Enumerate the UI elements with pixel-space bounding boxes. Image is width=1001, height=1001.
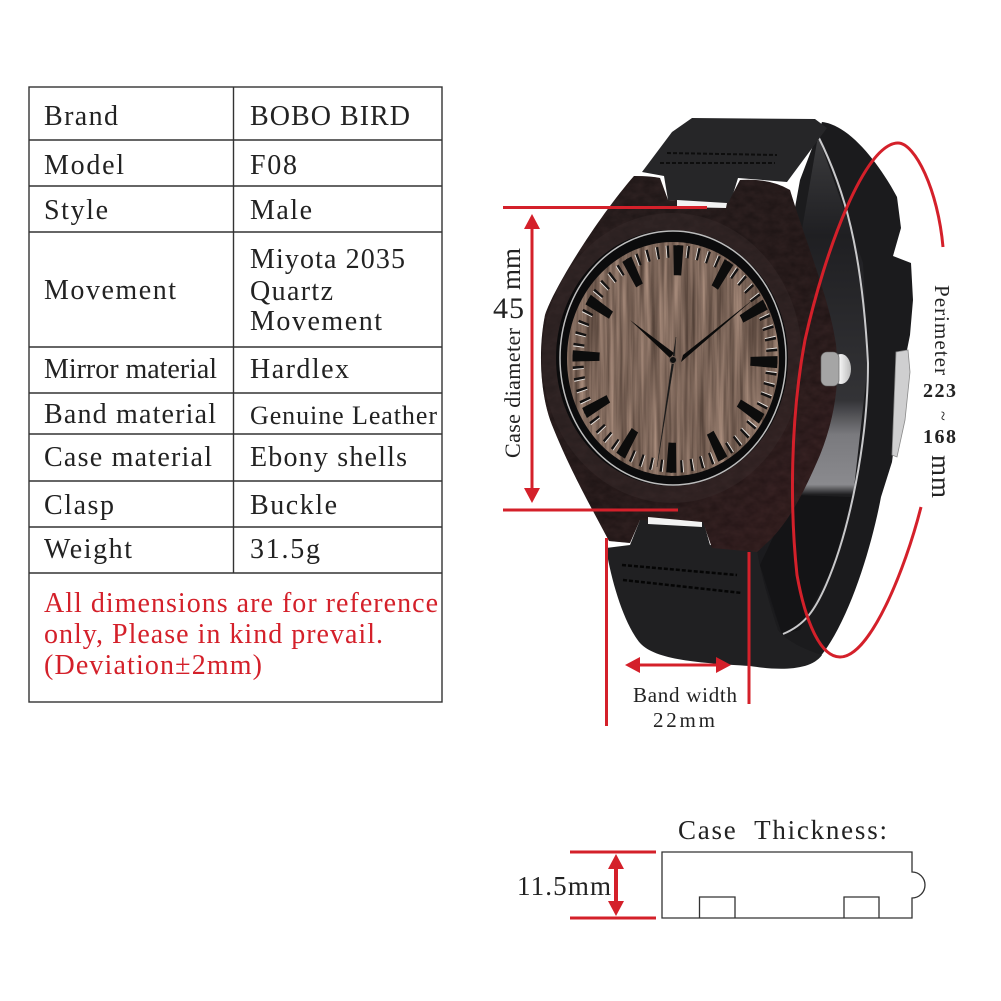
black inner ring — [556, 230, 788, 486]
red disclaimer note: (Deviation±2mm) — [44, 650, 262, 681]
back strap — [745, 122, 913, 668]
top strap — [642, 118, 827, 204]
perimeter loop — [792, 143, 943, 657]
row: clasp: Clasp — [44, 490, 114, 521]
mm unit: mm — [496, 248, 526, 290]
glass caseback — [757, 136, 868, 634]
bottom strap — [606, 520, 822, 669]
row: brand — [44, 101, 410, 132]
45 value: 45 — [493, 292, 524, 325]
223 value: 223 — [923, 380, 956, 402]
case diameter dimension — [493, 208, 707, 510]
perimeter label: Perimeter — [930, 285, 954, 375]
row: style: Male — [250, 195, 312, 226]
bezel — [542, 213, 802, 503]
row: mirror material: Hardlex — [250, 354, 349, 385]
case diameter label: Case diameter — [500, 327, 525, 458]
row: case material: Case material — [44, 442, 212, 473]
perimeter unit: mm — [926, 455, 956, 498]
extension lines — [606, 538, 749, 726]
168 value: 168 — [923, 426, 956, 448]
case thickness diagram — [517, 815, 925, 918]
row: band material: Genuine Leather — [250, 401, 437, 430]
strap inner shadow — [760, 495, 852, 634]
11.5mm value: 11.5mm — [517, 871, 611, 901]
crown — [821, 352, 851, 386]
hour bars — [583, 257, 767, 461]
silver caseback rim — [783, 136, 868, 634]
silver ring — [560, 231, 786, 485]
thickness extension lines — [570, 852, 656, 918]
watch hands — [630, 298, 755, 467]
row: movement: Miyota 2035 — [250, 244, 405, 275]
row: band material: Band material — [44, 399, 216, 430]
dial markers — [574, 248, 776, 470]
case side outline — [662, 852, 925, 918]
row: band material — [44, 399, 437, 430]
row: movement: Quartz — [250, 276, 333, 307]
row: movement: Movement — [250, 306, 382, 337]
row: model: Model — [44, 150, 124, 181]
row: clasp — [44, 490, 337, 521]
perimeter dimension — [792, 143, 956, 657]
row: model: F08 — [250, 150, 297, 181]
red disclaimer note: only, Please in kind prevail. — [44, 619, 383, 650]
bottom stitches — [622, 565, 742, 593]
row: movement: Movement — [44, 275, 176, 306]
infographic canvas — [28, 86, 956, 920]
extension lines — [503, 208, 707, 510]
wood dial — [567, 242, 779, 476]
case thickness heading: Case Thickness: — [678, 815, 887, 845]
tilde: ~ — [933, 411, 953, 421]
buckle — [892, 350, 910, 457]
row: style: Style — [44, 195, 108, 226]
row: brand: BOBO BIRD — [250, 101, 410, 132]
silver minute ticks — [574, 248, 776, 470]
row: case material: Ebony shells — [250, 442, 407, 473]
row: style — [44, 195, 312, 226]
red disclaimer note — [44, 588, 438, 681]
row: weight — [44, 534, 320, 565]
row: case material — [44, 442, 407, 473]
strap slots — [648, 200, 727, 527]
ebony case — [540, 176, 836, 552]
row: brand: Brand — [44, 101, 118, 132]
row: movement — [44, 244, 405, 337]
row: model — [44, 150, 297, 181]
specification table — [29, 87, 442, 702]
double arrow — [524, 214, 540, 503]
band width dimension — [606, 538, 749, 732]
top stitches — [660, 153, 777, 163]
red disclaimer note: All dimensions are for reference — [44, 588, 438, 619]
row: weight: Weight — [44, 534, 132, 565]
watch photo — [530, 118, 913, 669]
row: clasp: Buckle — [250, 490, 337, 521]
row: mirror material: Mirror material — [44, 354, 217, 385]
thickness arrow — [608, 854, 624, 916]
22mm value: 22mm — [653, 708, 715, 732]
band width label: Band width — [633, 683, 738, 707]
double arrow — [625, 657, 731, 673]
row: weight: 31.5g — [250, 534, 320, 565]
black minute ticks — [574, 248, 776, 470]
row: mirror material — [44, 354, 349, 385]
table grid — [29, 87, 442, 702]
